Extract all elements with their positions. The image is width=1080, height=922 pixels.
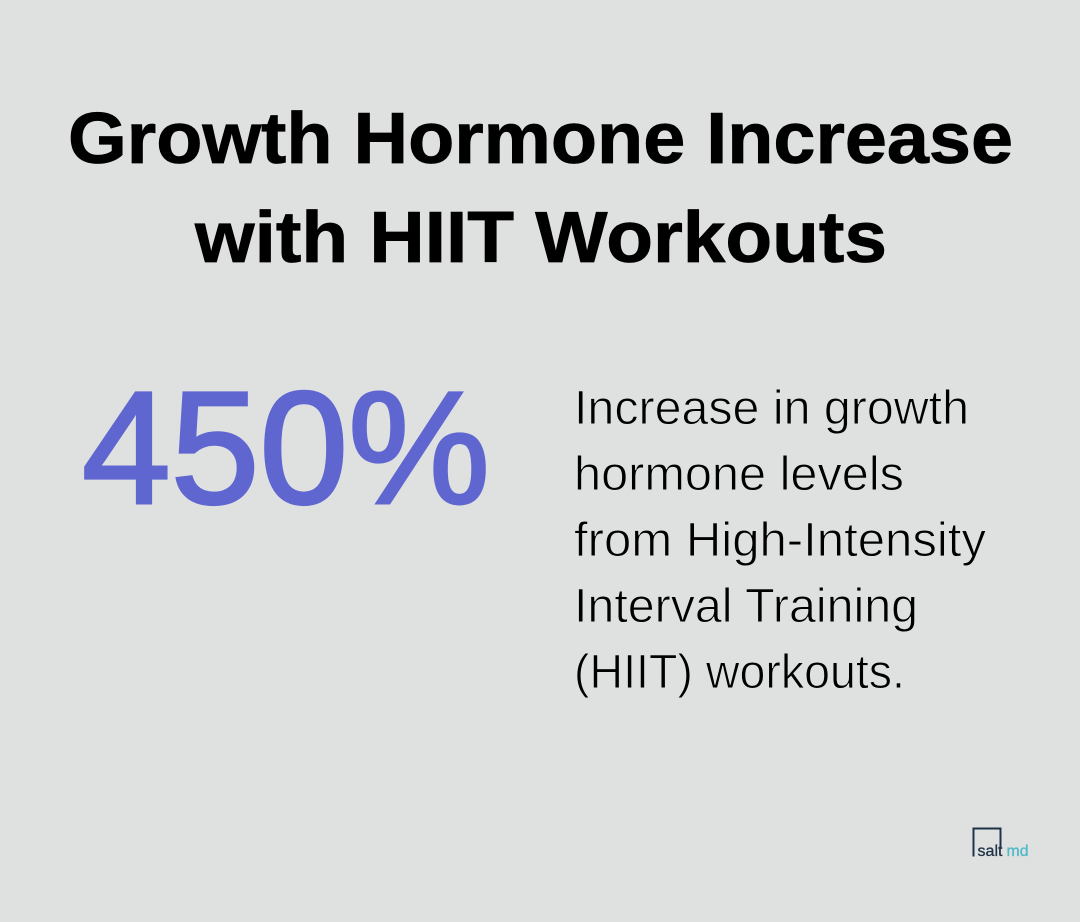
logo: saltmd: md — [1006, 843, 1028, 860]
description text: Interval Training — [574, 580, 918, 633]
title — [68, 99, 1013, 278]
description text: from High-Intensity — [574, 514, 986, 567]
title: Growth Hormone Increase — [68, 99, 1013, 179]
big statistic: 450%: 450% — [82, 358, 490, 537]
logo: saltmd — [974, 828, 1028, 860]
logo: saltmd: salt — [978, 843, 1003, 860]
description text: (HIIT) workouts. — [574, 646, 905, 699]
title: with HIIT Workouts — [194, 198, 887, 278]
description text: Increase in growth — [574, 382, 969, 435]
description text — [574, 382, 986, 699]
description text: hormone levels — [574, 448, 904, 501]
